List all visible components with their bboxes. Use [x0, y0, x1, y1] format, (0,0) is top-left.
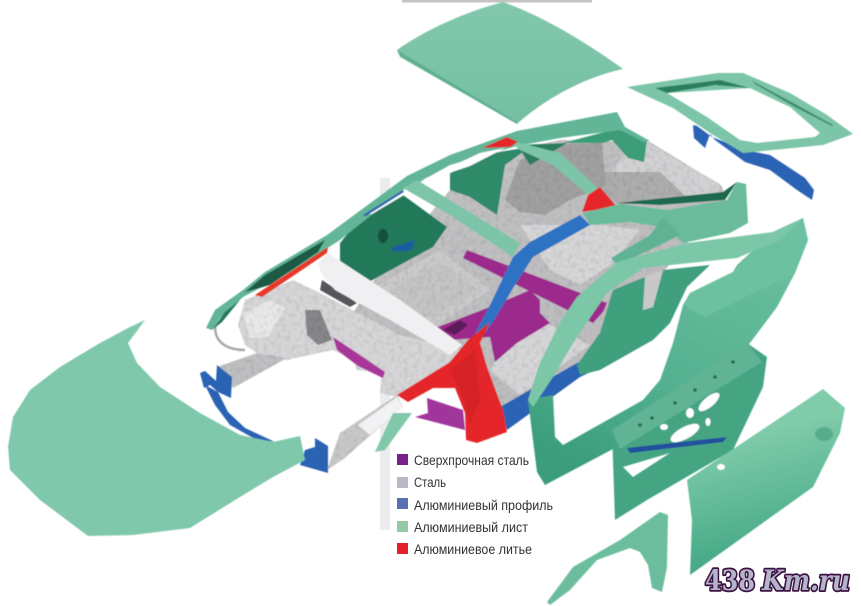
hood panel — [8, 320, 305, 536]
red cast node — [397, 322, 507, 443]
rear seat structure — [505, 143, 606, 215]
front magenta detail — [333, 337, 385, 378]
roof panel — [397, 2, 623, 124]
legend item: steel — [397, 474, 446, 490]
blue roof pillar — [470, 215, 590, 343]
floor and steel structure — [340, 140, 725, 418]
red joint rear — [582, 187, 617, 212]
door band holes — [638, 360, 735, 427]
rear roof crossbar — [508, 140, 600, 194]
rear inner green shell — [450, 127, 737, 215]
legend — [397, 452, 553, 557]
watermark: 438 — [705, 564, 755, 597]
windshield crossbar — [403, 180, 520, 257]
rail white cap — [358, 397, 403, 435]
rear panel steel — [612, 142, 720, 204]
front crash beam — [205, 385, 275, 442]
legend item: cast aluminium: Алюминиевое литье — [414, 541, 532, 557]
watermark: Km.ru — [761, 564, 850, 597]
front floor — [370, 250, 490, 330]
trunk frame — [627, 73, 853, 153]
headlight loop — [215, 305, 245, 350]
left crash bracket — [200, 365, 232, 398]
door inner — [612, 343, 767, 520]
door skin — [687, 389, 845, 575]
green gusset — [375, 413, 412, 452]
cowl bar — [318, 253, 462, 355]
door holes — [660, 390, 722, 446]
b pillar dark green — [577, 265, 710, 375]
door beam — [627, 437, 727, 453]
red joint top — [482, 137, 518, 148]
door handle — [815, 427, 833, 441]
legend item: steel: Сталь — [414, 474, 446, 490]
mirror hole — [717, 464, 725, 470]
fender — [547, 512, 668, 605]
front inner door panel — [340, 195, 447, 283]
quarter panel and side frame lower — [528, 218, 808, 485]
quarter panel light face — [683, 218, 808, 317]
blue sill — [500, 352, 620, 430]
rear beam — [693, 125, 814, 200]
magenta high strength steel — [415, 250, 607, 430]
magenta dark recess — [443, 320, 468, 335]
legend item: ultra high strength steel: Сверхпрочная сталь — [414, 452, 529, 468]
right crash bracket — [300, 438, 328, 473]
front engine bay steel — [217, 280, 460, 470]
rear quarter band — [583, 182, 748, 265]
watermark — [705, 564, 850, 597]
legend item: aluminium profile: Алюминиевый профиль — [414, 497, 553, 513]
red strip — [255, 247, 328, 297]
cowl dark slit — [320, 280, 357, 307]
front rail green — [206, 112, 650, 330]
legend item: aluminium sheet: Алюминиевый лист — [414, 519, 529, 535]
side frame arch — [528, 218, 803, 407]
